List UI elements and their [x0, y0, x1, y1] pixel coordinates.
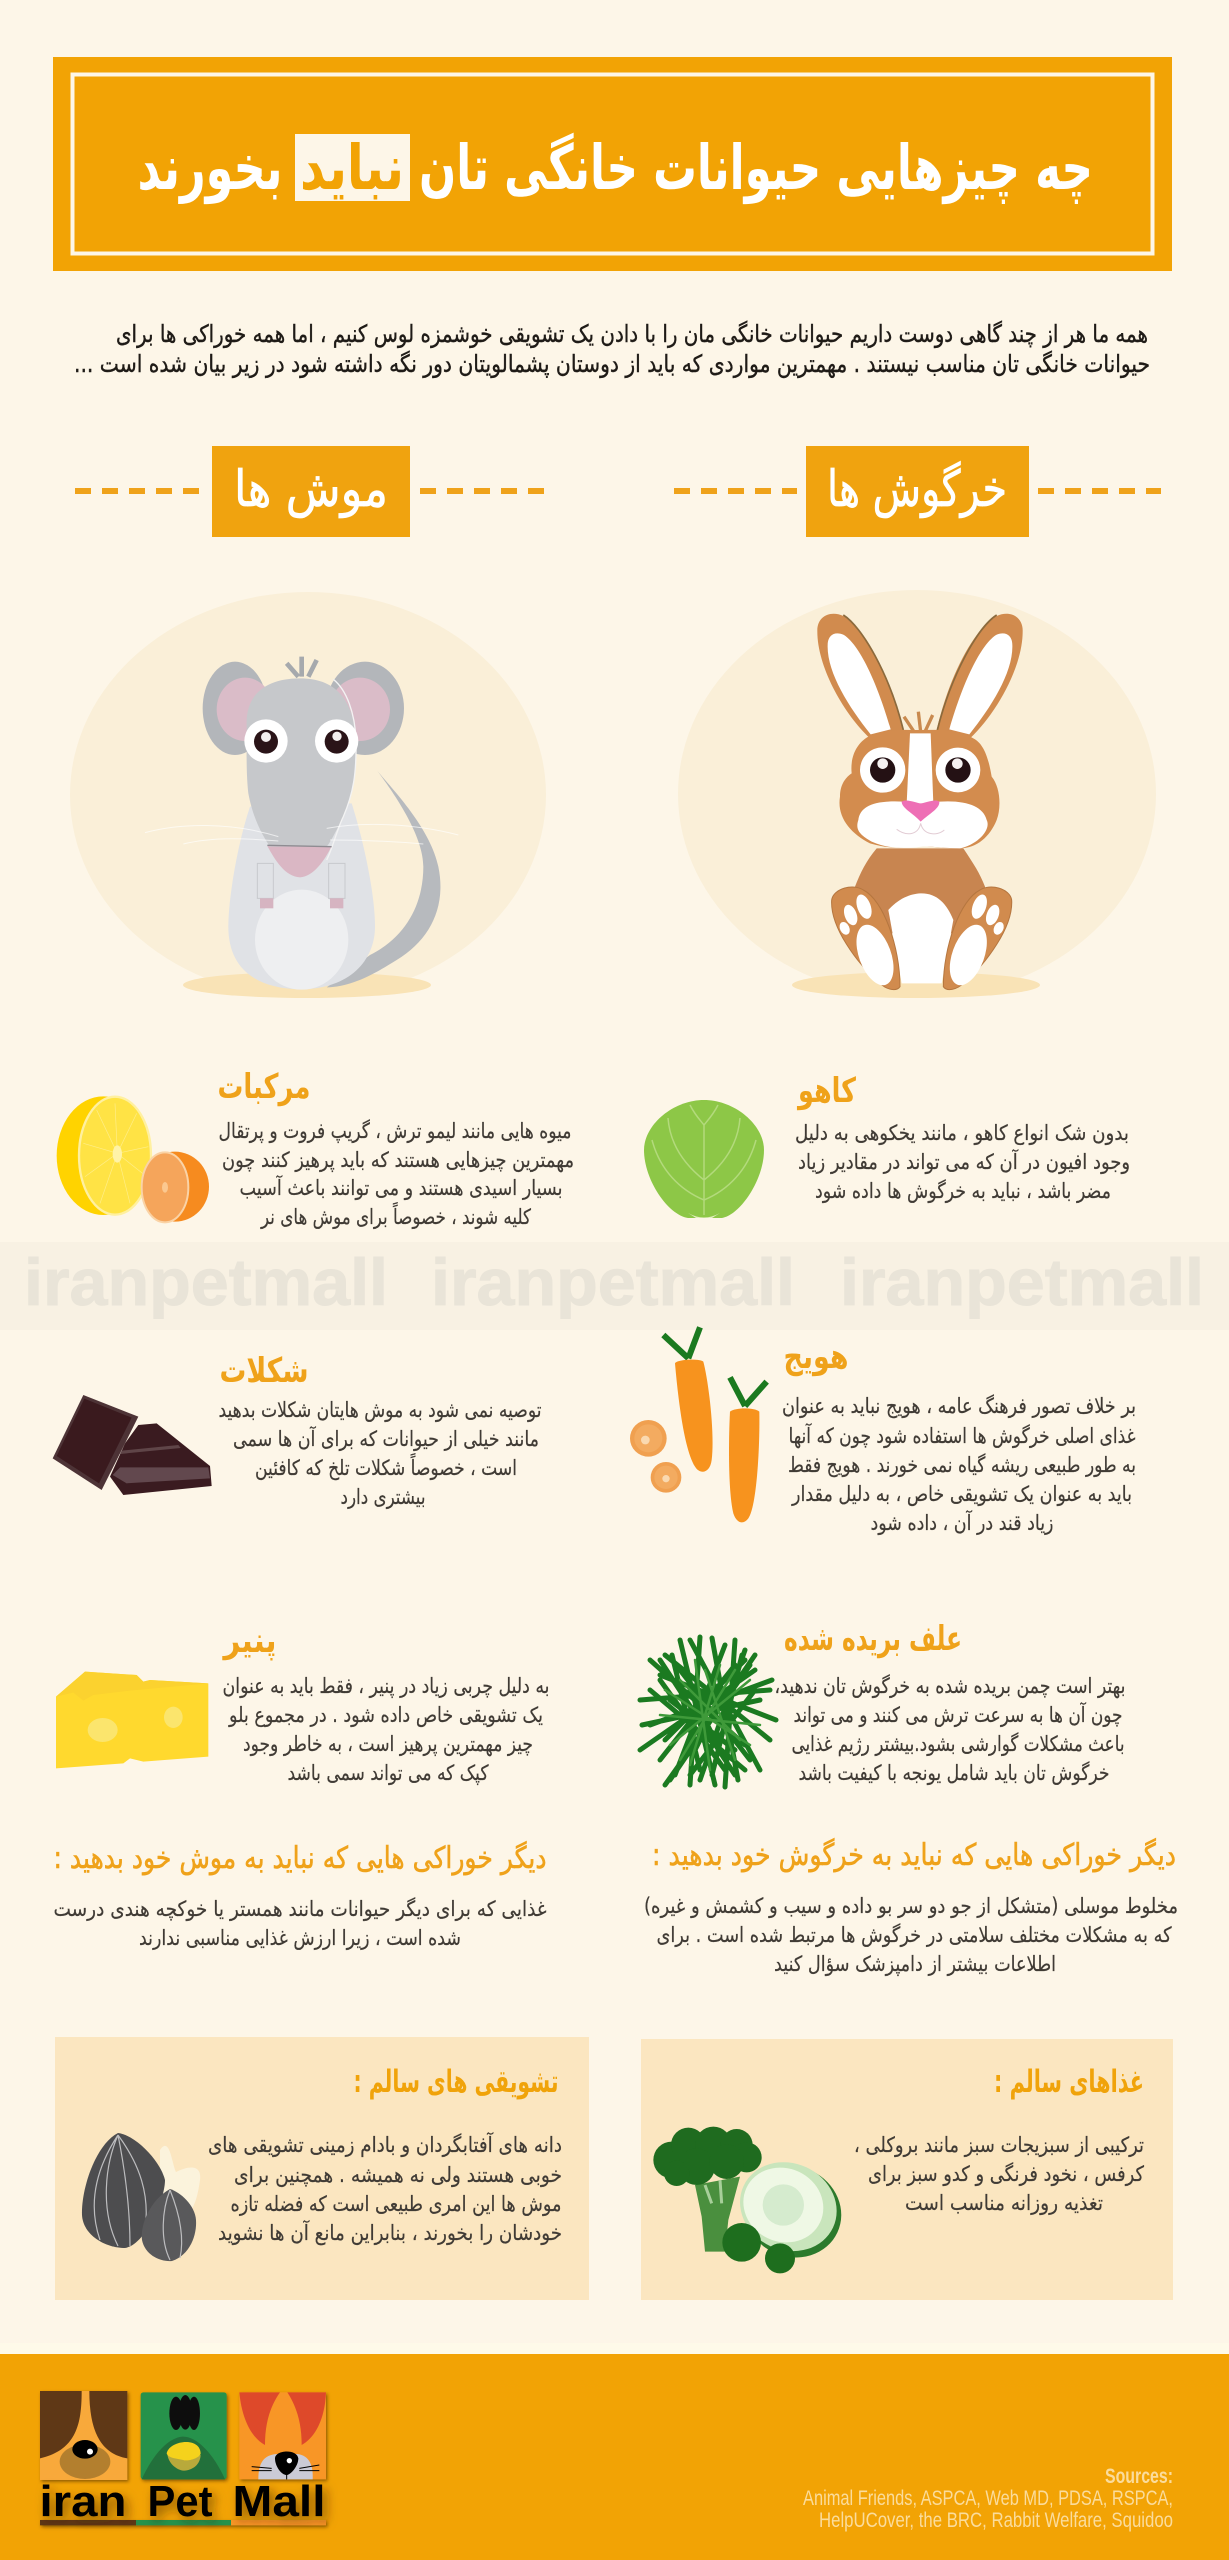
text: cut grass: خرگوش تان باید شامل یونجه با کیفیت باشد: [798, 1761, 1110, 1785]
logo: iran pet mall: [40, 2391, 326, 2526]
icon: lemon and orange: [57, 1096, 209, 1222]
illustration: rabbit: [817, 614, 1023, 990]
text: lettuce: بدون شک انواع کاهو ، مانند یخکوهی به دلیل: [795, 1121, 1129, 1145]
intro paragraph: [74, 320, 1150, 378]
sources: Sources:: [1105, 2465, 1173, 2488]
heading: chocolate: شکلات: [220, 1351, 308, 1391]
icon: carrots: [630, 1327, 767, 1522]
text: cheese: چیز مهمترین پرهیز است ، به خاطر وجود: [243, 1732, 533, 1756]
text: chocolate: است ، خصوصاً شکلات تلخ که کافئین: [255, 1452, 517, 1480]
heading: healthy foods: غذاهای سالم :: [994, 2064, 1144, 2100]
icon: cheese: [56, 1672, 208, 1768]
text: cheese: [222, 1674, 550, 1785]
text: other foods for mice: [54, 1897, 547, 1950]
background oval: mouse: [70, 592, 546, 998]
text: citrus: [218, 1119, 574, 1229]
section heading: mice: موش ها: [234, 460, 388, 518]
text: healthy treats: [208, 2132, 562, 2245]
text: healthy treats: خوبی هستند ولی نه همیشه . همچنین برای: [234, 2163, 562, 2187]
text: healthy treats: خودشان را بخورند ، بنابراین مانع آن ها نشوید: [218, 2220, 562, 2245]
text: citrus: مهمترین چیزهایی هستند که باید پرهیز کنند چون: [222, 1148, 574, 1172]
text: cheese: یک تشویقی خاص داده شود . در مجموع بلو: [228, 1703, 543, 1727]
text: chocolate: توصیه نمی شود به موش هایتان شکلات بدهید: [218, 1398, 542, 1422]
text: carrot: بر خلاف تصور فرهنگ عامه ، هویج نباید به عنوان: [782, 1394, 1136, 1418]
text: lettuce: [795, 1121, 1130, 1203]
text: carrot: زیاد قند در آن ، داده شود: [870, 1510, 1054, 1535]
icon: cut grass: [640, 1637, 776, 1787]
title banner: نباید: [300, 131, 404, 204]
section heading: rabbits: [674, 446, 1161, 537]
text: carrot: باید به عنوان یک تشویقی خاص ، به دلیل مقدار: [791, 1482, 1132, 1506]
text: healthy foods: [854, 2133, 1144, 2215]
logo: iran pet mall: iran: [40, 2477, 127, 2526]
text: healthy foods: ترکیبی از سبزیجات سبز مانند بروکلی ،: [854, 2133, 1144, 2157]
text: healthy foods: تغذیه روزانه مناسب است: [905, 2191, 1103, 2215]
footer band: [0, 2343, 1229, 2560]
text: carrot: به طور طبیعی ریشه گیاه نمی خورند . هویج فقط: [788, 1453, 1136, 1477]
text: cut grass: باعث مشکلات گوارشی بشود.بیشتر رژیم غذایی: [792, 1732, 1124, 1757]
text: chocolate: مانند خیلی از حیوانات که برای آن ها سمی: [233, 1426, 539, 1451]
icon: chocolate: [53, 1395, 212, 1495]
illustration: mouse: [145, 657, 458, 990]
text: cut grass: [774, 1674, 1126, 1785]
text: cut grass: چون آن ها به سرعت ترش می کنند و می تواند: [794, 1702, 1122, 1727]
text: other foods for mice: غذایی که برای دیگر حیوانات مانند همستر یا خوکچه هندی درست: [54, 1897, 547, 1921]
panel: healthy treats: [55, 2037, 589, 2300]
heading: healthy treats: تشویقی های سالم :: [354, 2064, 558, 2100]
text: carrot: [782, 1394, 1136, 1535]
icon: lettuce: [644, 1100, 764, 1218]
text: healthy treats: دانه های آفتابگردان و بادام زمینی تشویقی های: [208, 2132, 562, 2157]
text: other foods for mice: شده است ، زیرا ارزش غذایی مناسبی ندارند: [139, 1926, 461, 1950]
title banner: بخورند: [138, 131, 282, 204]
text: cheese: کپک که می تواند سمی باشد: [288, 1761, 488, 1785]
text: healthy foods: کرفس ، نخود فرنگی و کدو سبز برای: [868, 2162, 1144, 2186]
text: citrus: میوه هایی مانند لیمو ترش ، گریپ فروت و پرتقال: [218, 1119, 572, 1143]
text: chocolate: بیشتری دارد: [340, 1485, 426, 1509]
heading: lettuce: کاهو: [797, 1071, 856, 1111]
heading: cut grass: علف بریده شده: [784, 1619, 962, 1659]
title banner: [53, 57, 1172, 271]
heading: other foods for mice: دیگر خوراکی هایی که نباید به موش خود بدهید :: [54, 1841, 546, 1876]
heading: carrot: هویج: [784, 1337, 848, 1377]
section heading: rabbits: خرگوش ها: [827, 460, 1007, 518]
sources: [803, 2465, 1173, 2532]
logo: iran pet mall: Mall: [232, 2477, 326, 2526]
text: other foods for rabbits: [644, 1894, 1178, 1976]
ground shadow: mouse: [183, 972, 431, 998]
watermark band: [0, 1242, 1229, 1330]
text: lettuce: مضر باشد ، نباید به خرگوش ها داده شود: [815, 1179, 1111, 1203]
heading: cheese: پنیر: [222, 1621, 276, 1661]
panel: healthy foods: [641, 2039, 1173, 2300]
watermark band: iranpetmall: [840, 1245, 1204, 1319]
watermark band: iranpetmall: [24, 1245, 388, 1319]
heading: citrus: مرکبات: [218, 1067, 310, 1107]
text: citrus: کلیه شوند ، خصوصاً برای موش های نر: [260, 1201, 531, 1229]
text: citrus: بسیار اسیدی هستند و می توانند باعث آسیب: [240, 1175, 562, 1200]
text: carrot: غذای اصلی خرگوش ها استفاده شود چون که آنها: [788, 1423, 1136, 1448]
section heading: mice: [75, 446, 546, 537]
background oval: rabbit: [678, 590, 1156, 998]
text: cheese: به دلیل چربی زیاد در پنیر ، فقط باید به عنوان: [222, 1674, 550, 1698]
watermark band: iranpetmall: [431, 1245, 795, 1319]
icon: broccoli and cucumber: [653, 2127, 856, 2273]
text: cut grass: بهتر است چمن بریده شده به خرگوش تان ندهید،: [774, 1674, 1126, 1698]
logo: iran pet mall: Pet: [148, 2477, 213, 2526]
ground shadow: rabbit: [792, 972, 1040, 998]
text: healthy treats: موش ها این امری طبیعی است که فضله تازه: [230, 2192, 562, 2216]
icon: sunflower seeds: [82, 2133, 200, 2261]
text: chocolate: [218, 1398, 542, 1509]
text: other foods for rabbits: اطلاعات بیشتر از دامپزشک سؤال کنید: [774, 1952, 1056, 1976]
text: lettuce: وجود افیون در آن که می تواند در مقادیر زیاد: [798, 1149, 1130, 1174]
